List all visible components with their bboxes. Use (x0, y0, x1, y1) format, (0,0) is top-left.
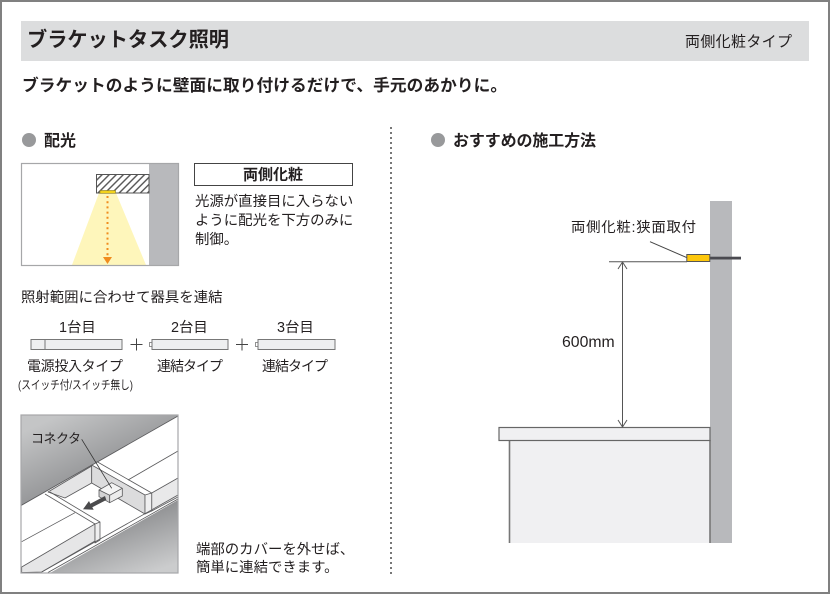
title bar (21, 21, 809, 61)
subtitle: ブラケットのように壁面に取り付けるだけで、手元のあかりに。 (22, 75, 507, 95)
arrow (83, 496, 106, 510)
connection diagram (18, 319, 335, 392)
label box: both-side finish (194, 164, 352, 186)
unit 3: 3台目 (277, 319, 314, 336)
caption: 簡単に連結できます。 (196, 559, 338, 576)
installation label: 両側化粧:狭面取付 (571, 219, 696, 236)
unit 1: (スイッチ付/スイッチ無し) (18, 377, 133, 392)
right inner wall (92, 465, 145, 514)
section heading: light distribution: 配光 (44, 132, 76, 150)
installation diagram (499, 201, 741, 543)
fixture (650, 242, 741, 262)
title: ブラケットタスク照明 (27, 28, 229, 52)
plus (130, 338, 142, 350)
right fixture end (145, 493, 152, 514)
unit 1 (18, 319, 133, 392)
light distribution diagram (22, 164, 178, 266)
counter and cabinet (499, 428, 710, 543)
connector illustration (21, 415, 178, 573)
left fixture end (95, 522, 100, 543)
section heading: light distribution (22, 132, 76, 150)
connection heading: 照射範囲に合わせて器具を連結 (21, 288, 222, 306)
dimension value: 600mm (562, 334, 615, 351)
unit 2: 連結タイプ (157, 358, 223, 374)
connector label: コネクタ (31, 431, 81, 446)
caption: 端部のカバーを外せば、 (196, 541, 354, 558)
description text: ように配光を下方のみに (195, 212, 353, 229)
left fixture front (22, 524, 95, 572)
leader line (82, 439, 112, 488)
unit 1: 1台目 (59, 319, 96, 336)
wall (710, 201, 732, 543)
label box: both-side finish: 両側化粧 (243, 166, 303, 184)
unit 2: 2台目 (171, 319, 208, 336)
description text: 制御。 (195, 231, 238, 248)
type label: 両側化粧タイプ (685, 34, 792, 50)
dimension (609, 262, 687, 427)
plus (236, 338, 248, 350)
unit 3: 連結タイプ (262, 358, 328, 374)
section heading: installation: おすすめの施工方法 (453, 131, 596, 150)
connector block (99, 483, 122, 503)
caption (196, 541, 354, 576)
right fixture front (152, 478, 178, 511)
center dotted divider (390, 127, 392, 574)
unit 3 (256, 319, 335, 374)
unit 1: 電源投入タイプ (27, 358, 123, 374)
description text: 光源が直接目に入らない (195, 193, 353, 210)
unit 2 (150, 319, 228, 374)
opening back wall (48, 466, 92, 498)
description text (195, 193, 353, 248)
